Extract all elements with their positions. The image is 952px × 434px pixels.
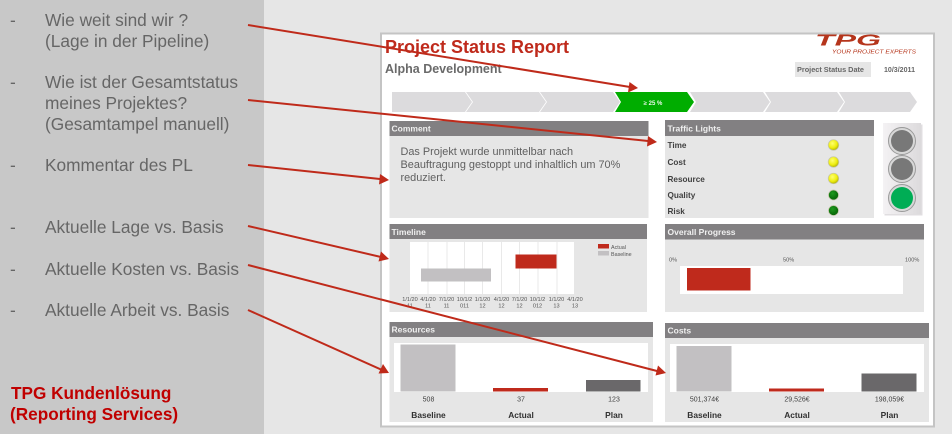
status date: Project Status Date <box>797 67 864 74</box>
bar chart: 198,059€ <box>875 396 904 404</box>
text block: questions: Aktuelle Kosten vs. Basis <box>45 259 239 279</box>
axis labels: 7/1/20 <box>512 297 527 303</box>
progress bar: 0% <box>669 258 677 264</box>
panel: traffic lights: Traffic Lights <box>668 124 721 134</box>
comment text: Das Projekt wurde unmittelbar nach <box>400 146 573 158</box>
text block: questions: Aktuelle Lage vs. Basis <box>45 217 224 237</box>
text block: questions: - <box>10 10 16 30</box>
bar chart: 508 <box>423 396 434 404</box>
panel: overall progress <box>665 224 924 312</box>
text block: questions <box>10 10 239 320</box>
panel: comment <box>390 121 648 218</box>
axis labels: 012 <box>533 304 542 310</box>
axis labels: 4/1/20 <box>420 297 436 303</box>
active stage: ≥ 25 % <box>644 101 663 107</box>
bar chart: Baseline <box>687 410 722 420</box>
text block: questions: Aktuelle Arbeit vs. Basis <box>45 300 230 320</box>
text block: questions: - <box>10 259 16 279</box>
axis labels: 11 <box>444 304 449 310</box>
active stage <box>615 92 694 112</box>
text block: questions: - <box>10 155 16 175</box>
text block: questions: (Lage in der Pipeline) <box>45 31 209 51</box>
legend <box>598 244 632 258</box>
axis labels: 4/1/20 <box>567 297 583 303</box>
title: Project Status Report <box>385 37 569 57</box>
axis labels: 13 <box>553 304 560 310</box>
pipeline chevrons <box>392 92 917 112</box>
panel: resources <box>390 322 653 422</box>
bar chart: 123 <box>608 396 620 404</box>
row labels <box>668 141 705 216</box>
panel: status report <box>381 32 934 426</box>
comment text: reduziert. <box>400 172 446 184</box>
axis labels: 13 <box>572 304 578 310</box>
bar chart <box>394 343 648 420</box>
bar chart: Plan <box>605 410 623 420</box>
logo: TPG: TPG <box>815 32 881 50</box>
text block: questions: meines Projektes? <box>45 93 187 113</box>
comment text: Beauftragung gestoppt und inhaltlich um 70% <box>400 159 621 171</box>
subtitle: Alpha Development <box>385 62 503 76</box>
axis labels: 10/1/2 <box>530 297 545 303</box>
arrow: pipeline <box>248 25 638 92</box>
panel: timeline: Timeline <box>392 227 426 237</box>
gantt chart <box>402 242 632 310</box>
panel: costs: Costs <box>668 326 691 336</box>
axis labels: 12 <box>479 304 486 310</box>
axis labels: 1/1/20 <box>402 297 418 303</box>
bar chart: Plan <box>881 410 898 420</box>
panel: traffic lights <box>665 120 874 218</box>
axis labels: 12 <box>516 304 523 310</box>
arrow: resources <box>248 310 389 374</box>
progress bar: 100% <box>905 258 919 264</box>
icon: overall traffic light <box>883 123 922 216</box>
progress bar <box>669 258 919 294</box>
status date: 10/3/2011 <box>884 67 915 74</box>
row labels: Risk <box>668 207 685 216</box>
panel: comment: Comment <box>392 124 431 134</box>
bar chart: 37 <box>517 396 525 404</box>
axis labels: 11 <box>407 304 413 310</box>
axis labels: 1/1/20 <box>475 297 490 303</box>
axis labels: 12 <box>498 304 505 310</box>
bar chart: 501,374€ <box>690 396 719 404</box>
arrow: traffic lights <box>248 100 657 146</box>
comment text <box>400 146 621 184</box>
text block: questions: Wie ist der Gesamtstatus <box>45 72 238 92</box>
arrow: costs <box>248 265 666 376</box>
axis labels <box>402 297 583 310</box>
callout: TPG Kundenlösung: TPG Kundenlösung <box>11 383 171 403</box>
axis labels: 10/1/2 <box>457 297 472 303</box>
row labels: Time <box>668 141 687 150</box>
axis labels: 011 <box>460 304 469 310</box>
text block: questions: - <box>10 300 16 320</box>
callout: TPG Kundenlösung <box>10 383 178 424</box>
text block: questions: - <box>10 217 16 237</box>
panel: left question list <box>0 0 264 434</box>
bar chart <box>670 344 924 420</box>
axis labels: 11 <box>425 304 431 310</box>
legend: Baseline <box>611 252 632 258</box>
text block: questions: Kommentar des PL <box>45 155 193 175</box>
arrow: timeline <box>248 226 389 262</box>
row labels: Cost <box>668 158 686 167</box>
axis labels: 1/1/20 <box>549 297 564 303</box>
bar chart: 29,526€ <box>784 396 810 404</box>
bar chart: Actual <box>508 410 534 420</box>
text block: questions: (Gesamtampel manuell) <box>45 114 229 134</box>
bar chart: Baseline <box>411 410 446 420</box>
text block: questions: Wie weit sind wir ? <box>45 10 188 30</box>
panel: timeline <box>390 224 647 312</box>
status date <box>795 62 915 77</box>
panel: overall progress: Overall Progress <box>668 227 736 237</box>
logo: TPG: YOUR PROJECT EXPERTS <box>832 50 916 56</box>
panel: resources: Resources <box>392 324 435 334</box>
row labels: Resource <box>668 175 705 184</box>
axis labels: 4/1/20 <box>494 297 509 303</box>
logo: TPG <box>815 32 916 56</box>
progress bar: 50% <box>783 258 794 264</box>
axis labels: 7/1/20 <box>439 297 454 303</box>
bar chart: Actual <box>784 410 810 420</box>
text block: questions: - <box>10 72 16 92</box>
arrow: comment <box>248 165 389 184</box>
callout: TPG Kundenlösung: (Reporting Services) <box>10 404 178 424</box>
status dots <box>828 140 839 216</box>
panel: costs <box>665 323 929 422</box>
row labels: Quality <box>668 191 696 200</box>
legend: Actual <box>611 245 626 251</box>
